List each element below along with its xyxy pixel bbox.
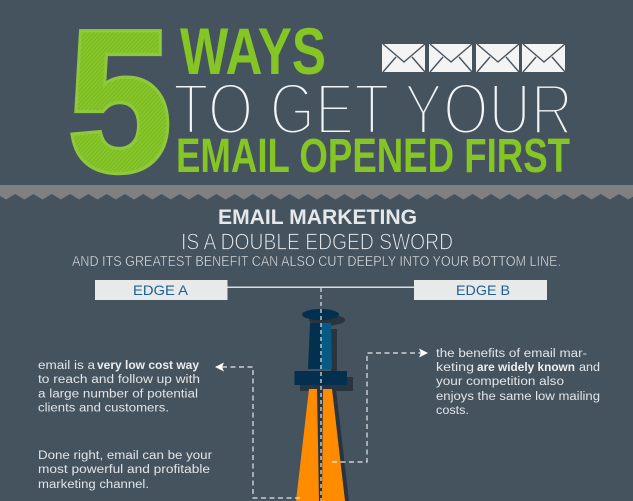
text block: done right: most powerful and profitable: [38, 464, 210, 476]
title: WAYS: WAYS: [180, 14, 326, 88]
text block: done right: [38, 450, 212, 491]
arrow: left connector: [215, 362, 300, 498]
text block: low cost: to reach and follow up with: [38, 374, 200, 386]
text block: done right: marketing channel.: [38, 479, 149, 491]
text block: widely known: costs.: [436, 405, 469, 417]
text block: widely known: the benefits of email mar-: [436, 348, 587, 360]
heading: Email Marketing: EMAIL MARKETING: [218, 206, 417, 229]
label: Edge B: EDGE B: [456, 282, 510, 298]
text block: done right: Done right, email can be your: [38, 450, 212, 462]
label: Edge B: [414, 280, 547, 300]
icon: sword: [294, 309, 353, 501]
text block: low cost: a large number of potential: [38, 388, 198, 400]
zigzag divider band: [0, 185, 633, 200]
text block: widely known: are widely known: [477, 362, 575, 374]
text block: widely known: your competition also: [436, 376, 564, 388]
text block: low cost: email is a: [38, 360, 96, 372]
text block: low cost: [38, 360, 200, 414]
text block: widely known: enjoys the same low mailing: [436, 391, 600, 403]
arrow: right connector: [332, 348, 428, 462]
connector line between edges: [227, 287, 414, 288]
dashed centre line: [320, 288, 322, 501]
text block: widely known: keting: [436, 362, 474, 374]
text block: low cost: very low cost way: [97, 360, 200, 372]
text block: widely known: and: [579, 362, 600, 374]
subheading: double edged sword: IS A DOUBLE EDGED SWORD: [181, 228, 453, 254]
label: Edge A: EDGE A: [133, 282, 189, 298]
text block: widely known: [436, 348, 600, 417]
text block: low cost: clients and customers.: [38, 402, 169, 414]
label: Edge A: [95, 280, 228, 300]
icon: envelopes: [382, 44, 565, 72]
